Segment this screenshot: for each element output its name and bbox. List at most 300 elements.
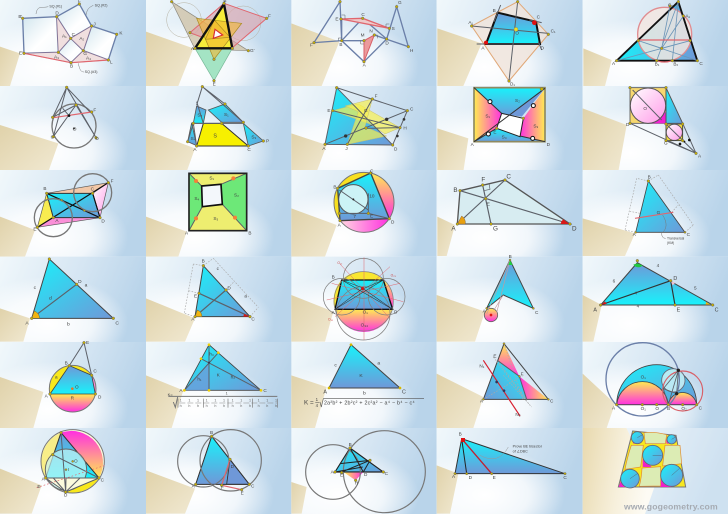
points: E — [86, 340, 89, 345]
secants — [53, 87, 96, 138]
formula: radical: 1 1 1 1 1 1 1 1 1 1 1 1 — [180, 399, 277, 403]
angle dots: S₃ — [533, 123, 538, 128]
angle marks and points: A — [483, 309, 487, 314]
circle segments — [49, 365, 96, 412]
vertices: K — [359, 373, 363, 379]
points and labels: 5 — [694, 285, 697, 290]
triangle — [601, 263, 713, 305]
points and labels: B — [667, 406, 670, 411]
inner small circle — [662, 369, 685, 392]
inner red triangle — [213, 29, 223, 38]
points: B' — [18, 14, 22, 19]
outline — [188, 87, 243, 146]
callout — [480, 444, 543, 459]
pink triangles — [24, 17, 108, 63]
points and labels: D — [78, 279, 82, 285]
connecting lines — [630, 90, 696, 153]
points: B — [210, 430, 213, 435]
quadrilateral — [338, 173, 389, 221]
square callouts: SQ.(#1) — [49, 5, 62, 9]
angle marks and points: B — [509, 254, 512, 259]
circles — [621, 432, 683, 488]
points and labels: 6 — [613, 279, 616, 284]
points: B — [648, 175, 651, 180]
callout: Prove BE bisector — [513, 444, 543, 448]
points: E — [493, 475, 496, 480]
points: A₃ — [54, 54, 59, 59]
ticks and markers: C — [410, 107, 414, 112]
points: C — [687, 232, 691, 237]
points — [479, 343, 554, 417]
square callouts — [36, 4, 107, 74]
points and labels: F — [481, 177, 485, 184]
points: E — [335, 17, 338, 22]
circle — [52, 104, 96, 148]
points and labels — [451, 174, 577, 233]
cyan top and bottom regions — [474, 88, 545, 142]
magenta tiles — [619, 436, 673, 487]
circle base — [334, 172, 394, 232]
lines — [663, 370, 678, 405]
triangle — [636, 181, 685, 232]
area formula: 4 — [316, 403, 319, 408]
cross lines — [472, 2, 548, 81]
dart — [487, 260, 533, 308]
points: S — [213, 133, 217, 139]
ticks and markers: G — [364, 108, 368, 113]
points — [186, 85, 269, 152]
points and labels: c — [34, 285, 37, 291]
panel: four squares on a pentagon — [0, 0, 146, 86]
markers: A₁ — [468, 20, 473, 25]
blue quadrilateral — [486, 13, 540, 44]
points: D — [95, 136, 99, 141]
panel: quadrilateral ABCD with large labels — [437, 170, 583, 257]
orange triangle star — [197, 18, 242, 59]
panel: square with inner square — [146, 170, 292, 257]
points and labels: B — [453, 187, 458, 194]
markers: G — [664, 141, 668, 146]
bisector — [32, 284, 77, 318]
points: C — [101, 477, 105, 482]
markers: C — [537, 15, 541, 20]
angle dots: A — [471, 142, 475, 147]
points and labels — [593, 259, 719, 313]
points: A — [480, 399, 484, 404]
inner white square — [202, 184, 222, 207]
panel: triangle with transversal — [583, 170, 728, 257]
yellow-magenta side regions — [474, 88, 545, 142]
points: S₄ — [191, 136, 196, 141]
circle outline — [41, 430, 104, 493]
points: L — [110, 59, 113, 64]
points: K — [119, 30, 123, 35]
points: S — [392, 26, 395, 31]
points: O — [73, 127, 77, 133]
points: S₂ — [197, 113, 202, 118]
triangle outline — [483, 344, 548, 399]
triangle blue part — [227, 459, 249, 484]
incircle — [45, 449, 87, 490]
grey triangle — [172, 2, 248, 51]
points and labels: O — [655, 406, 659, 411]
markers: D — [626, 122, 630, 127]
area formula: K = — [304, 399, 314, 406]
orange dots: S₃ — [213, 216, 218, 221]
corner fills — [652, 112, 666, 123]
circles — [34, 174, 112, 237]
markers: A — [698, 153, 702, 158]
quadrilateral outline and diagonals — [325, 88, 407, 145]
points and labels: C — [506, 174, 511, 181]
points: A — [331, 469, 335, 474]
panel: cyclic quadrilateral with incircle — [291, 169, 437, 257]
area formula: 1 — [316, 397, 319, 402]
panel: quadrilateral with crossing strips — [291, 86, 437, 172]
markers: D — [541, 45, 545, 50]
points: D — [98, 395, 102, 400]
triangle — [329, 345, 400, 388]
points — [191, 259, 255, 322]
points — [310, 0, 413, 68]
fan lines — [46, 433, 99, 492]
points: C — [251, 317, 255, 322]
points — [45, 340, 102, 400]
points: E — [370, 213, 373, 218]
cevians — [195, 290, 250, 317]
central rectangle — [47, 193, 100, 218]
points and labels — [25, 258, 119, 328]
points — [331, 442, 389, 486]
ticks and markers: J — [345, 146, 348, 151]
markers — [626, 86, 702, 158]
points: C — [263, 388, 267, 393]
callout: Transversal — [667, 236, 685, 240]
panel: dart with small circle — [437, 254, 583, 343]
points: D — [391, 219, 395, 224]
points — [333, 169, 395, 228]
points: A₂ — [79, 36, 84, 41]
segments to circle — [487, 260, 510, 314]
white center — [497, 113, 523, 137]
points and labels: 4 — [637, 303, 640, 308]
points: E — [241, 491, 244, 496]
points and labels: A — [612, 406, 616, 411]
altitude — [462, 439, 467, 474]
markers: O — [643, 106, 647, 111]
dimensions — [184, 258, 258, 317]
points: O — [75, 385, 79, 390]
points: D — [385, 40, 389, 45]
red line — [483, 360, 520, 416]
green triangle — [195, 48, 232, 81]
panel: triangle with angle bisector — [0, 257, 146, 343]
panel: triangle bisector problem — [437, 428, 583, 514]
center and labels: O₄₁ — [328, 318, 334, 322]
website watermark: www.gogeometry.com — [623, 502, 718, 512]
tangents — [69, 343, 92, 375]
points: A — [45, 393, 49, 398]
diagonals — [37, 183, 108, 227]
points and labels: A — [451, 226, 456, 233]
points: A₁ — [685, 13, 690, 18]
triangle — [455, 439, 565, 474]
top magenta segment — [61, 431, 103, 478]
yellow triangle — [195, 4, 232, 48]
points: F — [221, 485, 224, 490]
markers — [468, 0, 556, 87]
large circle — [630, 88, 666, 123]
points: c — [217, 266, 220, 271]
red chord — [53, 112, 92, 118]
outer triangles — [37, 183, 108, 227]
points: A — [192, 484, 196, 489]
points: G — [83, 51, 87, 56]
orange dots: S₂ — [234, 193, 239, 198]
points: E — [194, 293, 197, 298]
panel: quadrilateral with two circles — [0, 170, 146, 257]
center and labels: A — [332, 310, 336, 315]
altitudes — [184, 345, 261, 390]
area formula: 2a²b² + 2b²c² + 2c²a² − a⁴ − b⁴ − c⁴ — [324, 400, 415, 406]
orange dots — [185, 176, 251, 235]
points: M — [361, 33, 365, 38]
panel: star of triangles — [146, 0, 292, 86]
points — [37, 431, 105, 497]
points: B — [65, 361, 68, 366]
ticks and markers — [322, 86, 414, 151]
vertices: c — [334, 362, 337, 368]
dimension lines — [625, 175, 693, 232]
points: A — [633, 232, 637, 237]
points — [452, 431, 567, 480]
angle dots: D — [547, 142, 551, 147]
many circles — [323, 258, 405, 340]
triangle — [184, 345, 261, 390]
quadrilateral — [457, 180, 570, 224]
points: K — [217, 373, 221, 378]
ticks and markers: E — [327, 108, 330, 113]
triangle cyan part — [196, 436, 230, 484]
points: C — [699, 61, 703, 66]
circle outline — [49, 365, 96, 412]
left semicircle — [617, 382, 668, 405]
points: C — [550, 399, 554, 404]
inner lines — [339, 190, 389, 219]
triangle fill — [617, 2, 697, 61]
points: C — [385, 471, 389, 476]
points: h₂ — [231, 375, 235, 380]
faint circles — [167, 3, 261, 41]
points: C — [361, 12, 365, 17]
points: E' — [19, 51, 23, 56]
blue circle — [606, 343, 679, 416]
points: B — [333, 185, 336, 190]
points and labels: C — [699, 405, 703, 410]
vertices: a — [377, 361, 380, 367]
cyan pieces — [188, 104, 263, 146]
angle mark — [32, 311, 40, 318]
outer circle — [334, 172, 394, 232]
triangle — [32, 259, 113, 318]
points: R — [71, 395, 75, 400]
points: A₄ — [86, 55, 91, 60]
points: C — [93, 369, 97, 374]
quadrilateral — [618, 431, 686, 487]
yellow strips — [333, 99, 400, 144]
inner segments — [335, 448, 370, 472]
points and labels: d — [49, 296, 52, 302]
points: E — [493, 353, 496, 358]
circle — [638, 7, 692, 61]
ticks and markers: H — [403, 125, 407, 130]
markers: A — [481, 45, 485, 50]
markers: B — [493, 8, 496, 13]
red dashed line — [37, 465, 105, 488]
panel: trapezoid with circles in tiles — [583, 428, 728, 514]
points: D — [55, 10, 59, 15]
circles — [306, 431, 425, 513]
points: S₃ — [251, 135, 256, 140]
red circle — [663, 371, 703, 411]
angle marks — [601, 263, 711, 305]
points: 7 — [353, 214, 356, 219]
points: A — [612, 61, 616, 66]
points: F — [521, 371, 524, 376]
white lower region — [46, 478, 99, 492]
points: N₂ — [515, 412, 521, 417]
points: D — [231, 464, 235, 469]
triangle — [46, 433, 99, 478]
orange dots: A — [185, 230, 189, 235]
points — [170, 0, 271, 86]
radii and centers — [630, 435, 680, 479]
points: F — [111, 179, 114, 184]
points: B — [202, 259, 205, 264]
area formula — [304, 397, 424, 408]
square callouts: SQ.(#2) — [95, 4, 107, 8]
regions — [189, 173, 247, 231]
points and labels — [612, 369, 703, 411]
points: B — [339, 42, 342, 47]
points: H — [410, 48, 413, 53]
points: D — [227, 285, 231, 290]
center and labels: O₂₃ — [391, 274, 397, 278]
points — [192, 430, 255, 496]
points and labels: b — [67, 322, 70, 328]
lower small triangle — [344, 473, 363, 480]
points: B — [43, 186, 46, 191]
panel: triangles and squares with perpendiculars — [291, 0, 437, 86]
panel: triangle with yellow trapezoid — [146, 85, 292, 172]
points: S₁ — [224, 112, 229, 117]
points: P — [266, 139, 269, 144]
points: N — [369, 29, 373, 34]
center and labels: D — [394, 309, 398, 314]
center and labels: O₃₄ — [361, 323, 368, 328]
points: 10 — [369, 193, 375, 198]
cevians — [601, 281, 675, 305]
angle marks — [457, 216, 569, 224]
points: C — [563, 475, 567, 480]
points: E — [33, 227, 36, 232]
points: I — [68, 467, 69, 472]
top yellow-pink part — [497, 344, 519, 376]
angle marks and points: C — [535, 310, 539, 315]
inner circle — [339, 185, 368, 214]
angle dots: E — [493, 129, 496, 134]
angle dots — [471, 87, 551, 147]
points: B₁ — [655, 62, 660, 67]
points: A — [338, 223, 342, 228]
points and labels: C — [715, 307, 719, 313]
points and labels: D — [572, 226, 577, 233]
quadrilateral — [50, 366, 95, 394]
points: A — [191, 46, 195, 51]
markers: O — [515, 31, 519, 36]
points: H — [355, 481, 358, 486]
points: A₁ — [62, 33, 67, 38]
points and labels: C — [115, 320, 119, 326]
callout — [662, 215, 685, 245]
triangle — [195, 266, 250, 317]
points: E — [213, 81, 216, 86]
points: O — [74, 459, 78, 464]
ticks and markers: D — [394, 146, 398, 151]
points: C — [72, 32, 76, 37]
trapezoid — [335, 280, 393, 309]
cyan trapezoid — [666, 88, 683, 123]
points and labels: O₁ — [641, 406, 646, 411]
points: E — [340, 473, 343, 478]
circles — [178, 430, 261, 491]
panel: triangle with circumcircle and incircle — [0, 428, 146, 514]
points: E — [37, 484, 40, 489]
vertices — [323, 343, 406, 396]
orange dots: S₄ — [194, 196, 199, 201]
formula: radical: h h h h h h h h h h h h — [180, 404, 277, 408]
circumcircle segments — [334, 271, 393, 332]
points: h₃ — [209, 351, 214, 356]
diagonals — [457, 180, 570, 224]
right magenta-yellow part — [519, 376, 548, 399]
panel: cyclic quadrilateral with external point — [0, 340, 146, 428]
points: B — [459, 431, 462, 436]
points — [179, 343, 267, 393]
ticks and markers: F — [375, 94, 378, 99]
points: F — [310, 43, 313, 48]
red triangles — [341, 18, 389, 28]
center and labels: B — [332, 274, 335, 279]
right-angle marks — [338, 15, 389, 44]
square callouts: SQ.(#3) — [85, 70, 97, 74]
rectangle frame — [474, 88, 545, 142]
points: C — [251, 484, 255, 489]
angle dots: S₄ — [502, 135, 507, 140]
points: F — [268, 13, 271, 18]
points and labels: O₂ — [681, 406, 687, 411]
panel: triangle with two intersecting circles — [146, 428, 292, 514]
panel: squares with inscribed circles — [583, 86, 728, 172]
red radial lines — [327, 257, 403, 340]
diagonals — [335, 280, 393, 309]
panel: triangle area formula — [291, 342, 437, 428]
orange dots: B — [248, 230, 251, 235]
points: G — [657, 210, 661, 215]
points and labels: G — [493, 226, 498, 233]
markers: D₁ — [510, 82, 515, 87]
red chord — [638, 40, 690, 62]
